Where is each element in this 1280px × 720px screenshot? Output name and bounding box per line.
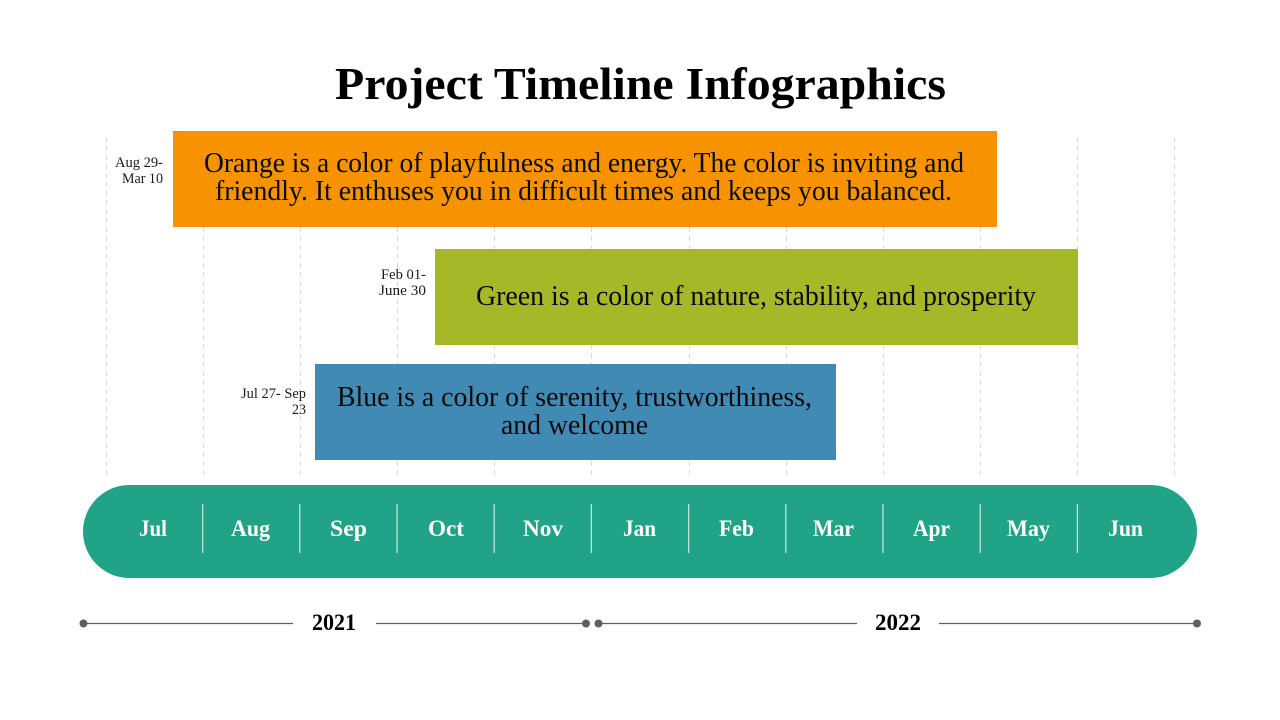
month labels: Aug [231, 516, 270, 541]
orange bar description: Orange is a color of playfulness and energy. The color is inviting and [204, 148, 964, 179]
blue bar dates [241, 386, 306, 418]
green bar description: Green is a color of nature, stability, and prosperity [476, 281, 1036, 312]
month labels [139, 516, 1143, 541]
orange bar dates: Mar 10 [122, 171, 163, 187]
panel: blue bar [315, 364, 836, 460]
orange bar dates [115, 155, 163, 187]
title: Project Timeline Infographics [335, 59, 946, 109]
month labels: Mar [813, 516, 854, 541]
month labels: Jul [139, 516, 167, 541]
green bar dates [379, 267, 426, 299]
month band [83, 485, 1197, 578]
orange bar description [204, 148, 964, 207]
orange bar description: friendly. It enthuses you in difficult times and keeps you balanced. [215, 176, 952, 207]
month labels: Nov [523, 516, 563, 541]
month labels: Sep [330, 516, 367, 541]
green bar dates: June 30 [379, 283, 426, 299]
year span: 2021: 2021 [312, 610, 356, 635]
panel: green bar [435, 249, 1078, 345]
blue bar dates: 23 [292, 402, 306, 418]
year span: 2021 [80, 610, 590, 635]
panel: orange bar [173, 131, 997, 227]
blue bar description [337, 382, 812, 441]
blue bar description: Blue is a color of serenity, trustworthiness, [337, 382, 812, 413]
year span: 2022 [594, 610, 1201, 635]
month labels: Oct [428, 516, 464, 541]
month labels: Jun [1108, 516, 1143, 541]
blue bar dates: Jul 27- Sep [241, 386, 306, 402]
orange bar dates: Aug 29- [115, 155, 163, 171]
month labels: May [1007, 516, 1050, 541]
blue bar description: and welcome [501, 410, 648, 441]
green bar dates: Feb 01- [381, 267, 426, 283]
year span: 2022: 2022 [875, 610, 921, 635]
month labels: Apr [913, 516, 950, 541]
month labels: Feb [719, 516, 754, 541]
month labels: Jan [623, 516, 656, 541]
